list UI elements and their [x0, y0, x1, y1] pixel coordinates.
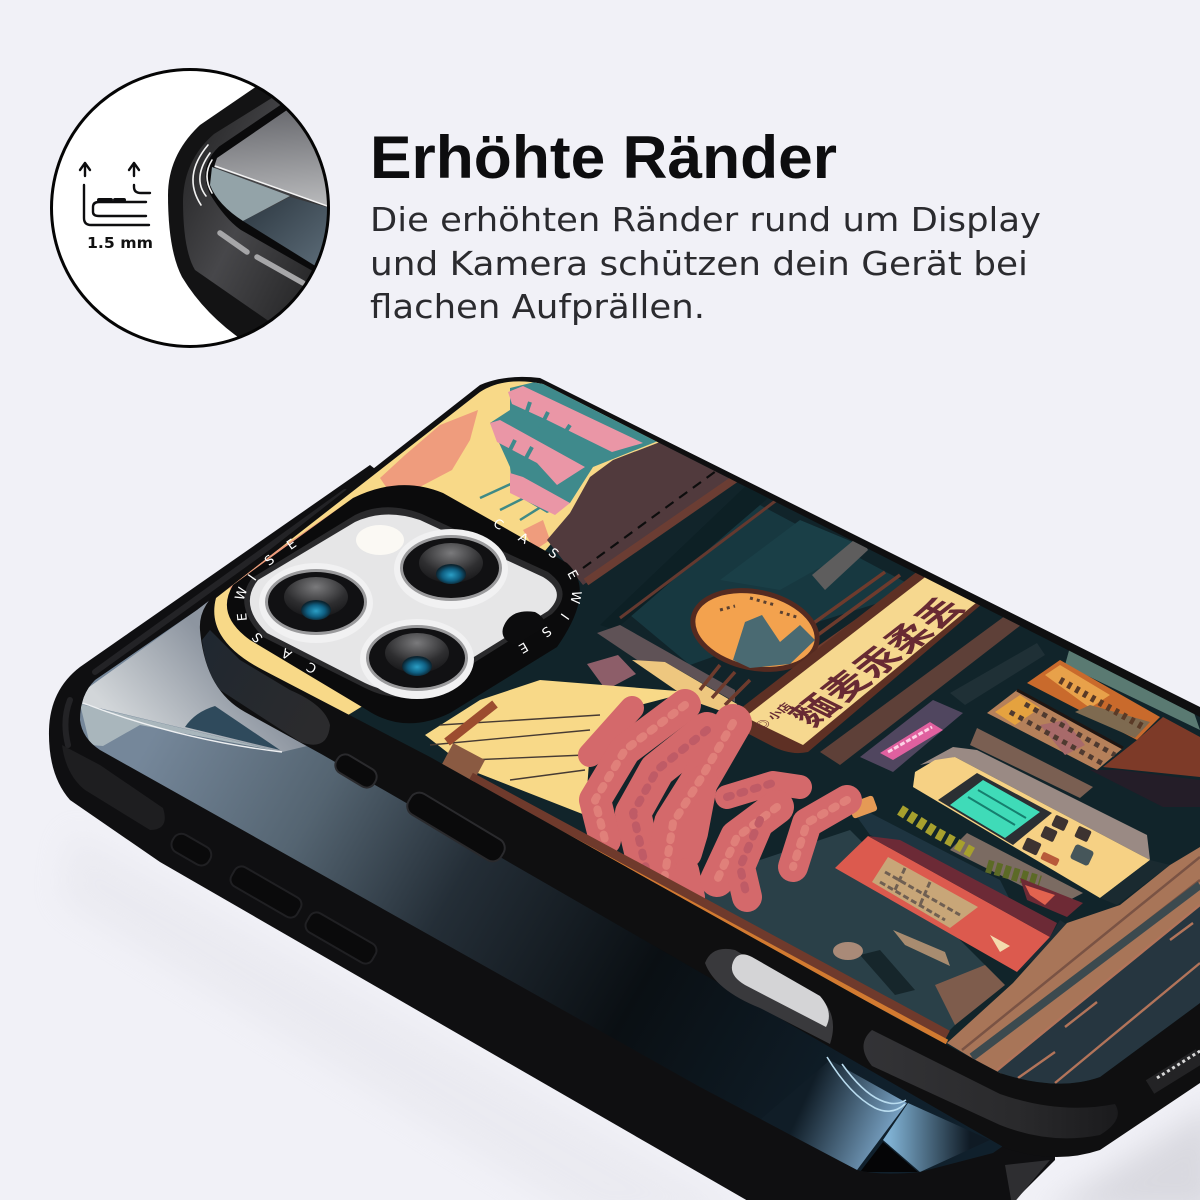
brand ring lettering [233, 516, 584, 676]
street figures [833, 930, 1005, 1025]
tree texture [595, 705, 847, 897]
cream kiosk [913, 728, 1170, 905]
back phone case [49, 465, 1055, 1200]
top shop strip [1065, 647, 1200, 730]
description text: und Kamera schützen dein Gerät bei [370, 244, 1028, 283]
pavement stripes [962, 857, 1200, 1058]
pale awning left [587, 625, 737, 716]
left bumper [202, 630, 330, 745]
lens: bottom [360, 619, 474, 699]
lidar sensor [502, 611, 544, 645]
camera ring [227, 485, 580, 723]
brown roof [547, 442, 732, 585]
brand ring lettering: I [557, 610, 571, 622]
phone screen reflections [210, 110, 327, 266]
cylinder accent [1025, 885, 1055, 905]
wood slats [700, 572, 915, 705]
brand ring lettering: E [516, 638, 530, 656]
lens: right [394, 529, 508, 609]
back phone screen [80, 600, 1002, 1174]
description text [370, 200, 1041, 326]
upper storefront [987, 660, 1200, 807]
back phone rim highlight [65, 492, 345, 745]
dark kerb band [972, 885, 1200, 1057]
wires on sky [480, 483, 540, 521]
red vending machine [835, 836, 1075, 972]
brand ring lettering: S [250, 629, 266, 645]
case corner close-up [168, 88, 327, 336]
brand ring lettering: A [515, 530, 531, 548]
heading: Erhöhte Ränder [370, 124, 837, 191]
slate floor behind tree [700, 830, 1000, 1033]
salmon clouds [380, 410, 478, 487]
brand ring lettering: W [233, 585, 251, 603]
brand ring lettering: I [246, 572, 260, 584]
teal and pink skyline [490, 382, 656, 515]
road markings [997, 905, 1200, 1083]
tag [852, 796, 878, 818]
pink cherry tree [590, 705, 847, 897]
inset circle: raised edge detail [51, 69, 345, 347]
flash [356, 525, 404, 555]
icon: raised edge diagram [80, 163, 150, 225]
dim wall sign [950, 643, 1045, 705]
banner small print: ◎ 小店 [751, 700, 796, 731]
cylinder [1020, 878, 1083, 917]
back phone [49, 465, 1200, 1200]
dark building base [349, 482, 1200, 1058]
lens: left [259, 563, 373, 643]
camera bumper [227, 485, 584, 723]
inner bevel [244, 507, 563, 697]
case artwork [200, 370, 1200, 1100]
brand ring lettering: S [538, 622, 554, 640]
impact arcs [193, 145, 212, 205]
mossy wall behind kiosk [950, 833, 1083, 905]
label: 1.5 mm: 1.5 mm [87, 234, 153, 252]
brown pavement [947, 847, 1200, 1075]
brand ring lettering: E [235, 612, 251, 622]
front phone case [200, 377, 1200, 1157]
kerb [470, 778, 947, 1036]
brand ring lettering: C [304, 658, 320, 676]
brand ring lettering: S [262, 553, 278, 569]
bottom right bumper [864, 1030, 1118, 1138]
speaker grille [1150, 1056, 1200, 1087]
lower yellow sky with wires [425, 680, 690, 815]
wallpaper glow [793, 1060, 907, 1170]
shop banner [742, 573, 980, 754]
round lantern sign [690, 588, 820, 672]
neon sign [860, 700, 963, 772]
back phone side wall [1005, 1160, 1050, 1200]
lower banner wall [820, 610, 1030, 765]
description text: Die erhöhten Ränder rund um Display [370, 200, 1041, 239]
dark road [997, 905, 1200, 1090]
kiosk screen [938, 773, 1052, 845]
sky [205, 380, 673, 720]
kiosk buttons [1022, 815, 1094, 866]
brand ring lettering: S [545, 546, 561, 562]
back phone buttons [168, 830, 379, 967]
brand ring lettering: A [279, 644, 295, 662]
soft shadow [60, 830, 750, 1200]
vines [900, 810, 1040, 882]
camera plate [250, 514, 557, 691]
brand ring lettering: W [566, 589, 584, 605]
brand ring lettering: E [284, 536, 300, 554]
front phone side buttons [332, 751, 508, 865]
brand ring lettering: E [563, 568, 581, 582]
brand ring lettering: C [490, 516, 506, 534]
back phone lower bumper [62, 745, 165, 830]
banner characters: 麵麦汞柔丢 [782, 593, 975, 732]
teal windows [619, 500, 904, 665]
charging port [705, 949, 833, 1044]
description text: flachen Aufprällen. [370, 287, 705, 326]
orange kerb strip [470, 784, 947, 1042]
